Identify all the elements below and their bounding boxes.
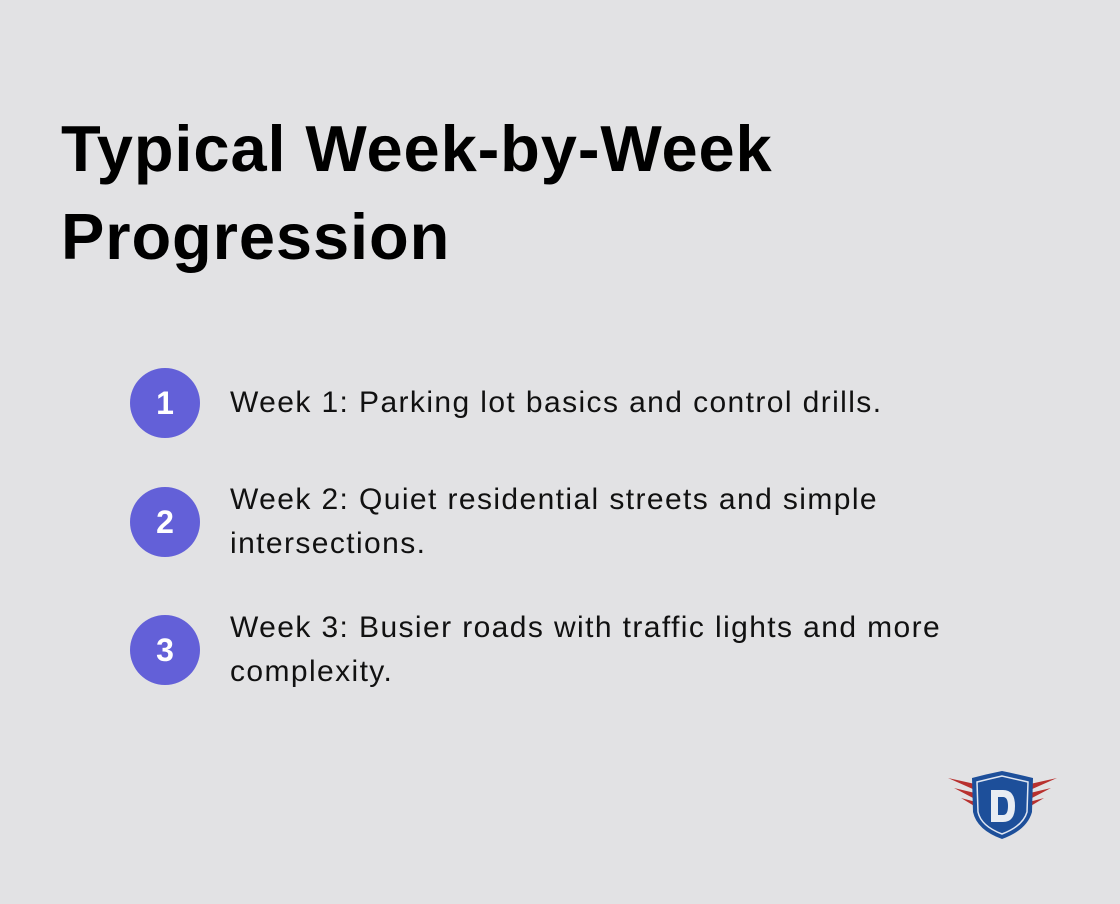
step 2 text: Week 2: Quiet residential streets and simple — [230, 483, 878, 516]
title: Typical Week-by-Week — [61, 112, 773, 185]
title: Progression — [61, 200, 450, 273]
step 2 text: intersections. — [230, 527, 426, 560]
step 1 text: Week 1: Parking lot basics and control drills. — [230, 386, 882, 419]
icon: logo shield — [948, 771, 1057, 839]
step 3 text: complexity. — [230, 655, 393, 688]
title — [61, 112, 773, 273]
step 2 circle — [130, 487, 200, 557]
step 3 text: Week 3: Busier roads with traffic lights and more — [230, 611, 941, 644]
step 2 text — [230, 483, 878, 560]
step 1 circle — [130, 368, 200, 438]
step 3 text — [230, 611, 941, 688]
step 1 circle: 1 — [156, 385, 174, 421]
step 3 circle — [130, 615, 200, 685]
step 3 circle: 3 — [156, 632, 174, 668]
step 2 circle: 2 — [156, 504, 174, 540]
